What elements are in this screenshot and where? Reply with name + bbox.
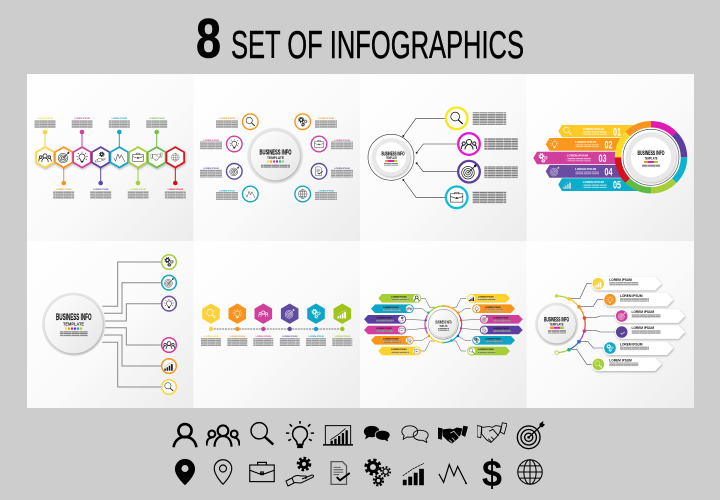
labels: LOREM IPSUM — [308, 336, 324, 338]
icon: outline pin — [214, 460, 232, 484]
card connectors — [569, 284, 616, 364]
icon: group — [207, 425, 239, 447]
icon: briefcase — [250, 462, 274, 482]
text blocks: LOREM IPSUM — [74, 118, 90, 120]
card text: LOREM IPSUM — [620, 294, 643, 298]
icon: magnifier — [251, 423, 273, 445]
hub circle — [372, 135, 418, 181]
hub circle — [535, 303, 578, 346]
ribbon 01 — [558, 125, 640, 138]
connector lines — [406, 298, 480, 351]
icon strip — [174, 421, 545, 494]
labels: LOREM IPSUM — [230, 336, 245, 338]
icon: document check — [331, 462, 350, 484]
hexagons — [36, 147, 184, 168]
icon: solid handshake — [438, 426, 468, 443]
ring icons — [446, 108, 480, 208]
icon: solid pin — [175, 459, 195, 485]
card circles — [592, 278, 628, 370]
icon: zigzag line — [439, 465, 467, 484]
ribbon 04 — [546, 165, 640, 178]
panel: central hub with eight surrounding icons — [194, 74, 360, 241]
icon: target — [517, 421, 545, 449]
text blocks: LOREM IPSUM — [56, 189, 72, 191]
labels: LOREM IPSUM — [318, 118, 334, 120]
card text: LOREM IPSUM — [632, 310, 654, 314]
labels: LOREM IPSUM — [203, 140, 219, 142]
right tags — [468, 294, 523, 355]
hub circle: TEMPLATE — [386, 156, 397, 160]
cards — [592, 277, 685, 371]
dashed timeline — [209, 327, 344, 331]
title — [196, 6, 524, 70]
text blocks: LOREM IPSUM — [149, 118, 165, 120]
hub circle: BUSINESS INFO — [382, 151, 405, 157]
hub circle: BUSINESS INFO — [544, 317, 569, 324]
left tags: LOREM IPSUM — [391, 296, 407, 298]
labels: LOREM IPSUM — [318, 190, 334, 192]
labels: LOREM IPSUM — [334, 140, 350, 142]
panel: arrow ribbons with colored ring — [526, 74, 694, 241]
ribbon 05 — [558, 178, 640, 192]
colored ring and hub: TEMPLATE — [440, 325, 448, 328]
ribbon 05: LOREM IPSUM — [583, 180, 604, 184]
icon: rising bars — [403, 463, 424, 485]
left tags: LOREM IPSUM — [376, 328, 392, 330]
right tags: LOREM IPSUM — [478, 349, 494, 351]
ribbon 05: 05 — [613, 180, 621, 192]
text blocks: LOREM IPSUM — [93, 189, 109, 191]
hub circle: BUSINESS INFO — [260, 147, 292, 156]
ring icons — [226, 114, 327, 202]
icon: dollar: $ — [482, 453, 502, 494]
icon: person — [174, 424, 196, 447]
ribbon 02 — [546, 138, 640, 152]
labels: LOREM IPSUM — [334, 168, 350, 170]
ring icon glyphs — [163, 258, 175, 391]
hexagon icons — [207, 309, 346, 318]
colored arc with dots — [555, 294, 586, 354]
left tags — [364, 294, 421, 355]
ring icons — [162, 255, 176, 394]
labels: LOREM IPSUM — [203, 168, 219, 170]
labels: LOREM IPSUM — [203, 336, 219, 338]
right tags: LOREM IPSUM — [478, 296, 494, 298]
hub circle: TEMPLATE — [267, 155, 284, 160]
labels — [200, 118, 353, 200]
ribbon 03: 03 — [598, 153, 606, 165]
icon: globe — [518, 460, 542, 484]
panel: white arrow cards with arc — [526, 241, 694, 408]
card text: LOREM IPSUM — [620, 342, 643, 346]
hub circle — [247, 128, 303, 184]
card text: LOREM IPSUM — [609, 358, 632, 362]
icon: light bulb — [286, 421, 314, 448]
hub circle: BUSINESS INFO — [56, 312, 92, 322]
ribbon 02: 02 — [604, 140, 612, 152]
branch lines — [368, 118, 457, 197]
panel: filled hexagons with dashed timeline — [194, 241, 360, 408]
right tags: LOREM IPSUM — [493, 328, 509, 330]
left tags: LOREM IPSUM — [391, 349, 407, 351]
panel: hub with four branches — [360, 74, 526, 241]
ribbon 03 — [533, 152, 640, 165]
text blocks — [34, 118, 186, 199]
hub circle: TEMPLATE — [63, 322, 85, 328]
hexagon icons — [39, 151, 179, 163]
description text blocks — [473, 112, 518, 203]
ribbon 01: LOREM IPSUM — [583, 127, 604, 131]
card icons — [595, 280, 626, 368]
colored ring and hub — [424, 305, 462, 344]
labels — [201, 336, 352, 346]
title: 8 — [196, 6, 221, 70]
ring icon glyphs — [451, 112, 477, 202]
colored ring — [615, 121, 687, 193]
hub circle — [42, 293, 105, 356]
ribbon 04: 04 — [604, 166, 613, 178]
hub disc: TEMPLATE — [644, 156, 658, 160]
ring icon glyphs — [230, 117, 323, 198]
icon: hand with gear — [286, 458, 314, 486]
hub disc: BUSINESS INFO — [638, 150, 664, 157]
panel: hexagon timeline — [27, 74, 194, 241]
elbow connectors — [102, 262, 162, 387]
icon: gears — [366, 460, 390, 485]
card text: LOREM IPSUM — [632, 326, 654, 330]
text blocks: LOREM IPSUM — [112, 118, 127, 120]
hub disc — [623, 129, 679, 185]
panel: hub with elbow connectors — [27, 241, 194, 408]
ribbon 01: 01 — [613, 126, 621, 138]
hub circle: TEMPLATE — [550, 322, 564, 326]
card text: LOREM IPSUM — [609, 278, 632, 282]
left tags: LOREM IPSUM — [383, 338, 399, 340]
right tags: LOREM IPSUM — [485, 338, 501, 340]
text blocks: LOREM IPSUM — [37, 118, 53, 120]
left tags: LOREM IPSUM — [383, 307, 399, 309]
filled hexagons — [202, 304, 351, 324]
right tags: LOREM IPSUM — [485, 307, 501, 309]
panel: symmetrical arrow tags around hub — [360, 241, 526, 408]
icon: outline chat bubbles — [402, 426, 428, 442]
icon: solid chat bubbles — [364, 426, 390, 442]
right tags: LOREM IPSUM — [493, 318, 509, 320]
left tags: LOREM IPSUM — [376, 318, 392, 320]
ribbon 03: LOREM IPSUM — [567, 154, 588, 158]
labels: LOREM IPSUM — [335, 336, 350, 338]
colored ring and hub: BUSINESS INFO — [436, 320, 452, 324]
labels: LOREM IPSUM — [219, 190, 235, 192]
card text — [609, 278, 660, 366]
labels: LOREM IPSUM — [282, 336, 298, 338]
labels: LOREM IPSUM — [219, 118, 235, 120]
ribbon 04: LOREM IPSUM — [575, 167, 597, 171]
text blocks: LOREM IPSUM — [130, 189, 146, 191]
icon: outline handshake — [477, 423, 507, 442]
title: SET OF INFOGRAPHICS — [231, 24, 524, 67]
ribbon 02: LOREM IPSUM — [575, 140, 597, 144]
icon: chart on screen — [323, 426, 353, 445]
labels: LOREM IPSUM — [256, 336, 271, 338]
stems and dots — [43, 130, 178, 185]
text blocks: LOREM IPSUM — [168, 189, 183, 191]
